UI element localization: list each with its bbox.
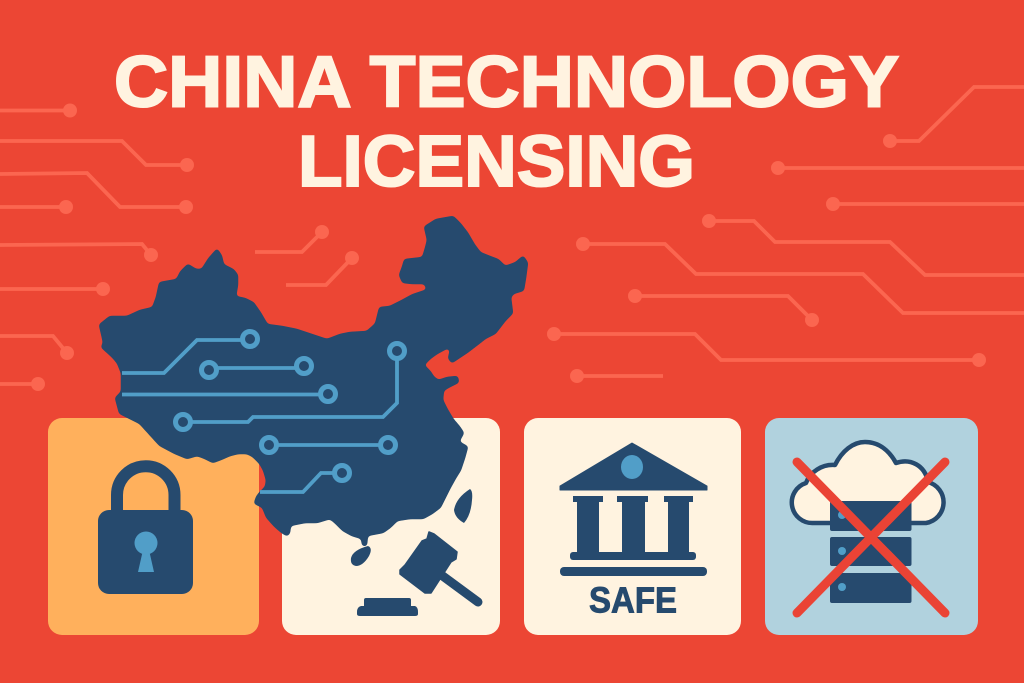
island: Hainan: [351, 546, 371, 566]
title: [114, 42, 899, 202]
icon: red cross: [797, 462, 945, 613]
title: CHINA TECHNOLOGY: [114, 42, 899, 122]
circuit nodes on map: [176, 332, 404, 480]
icon: server stack: [830, 501, 912, 603]
island: Taiwan: [454, 489, 472, 523]
icon: gavel: [357, 532, 478, 616]
map of China: [100, 217, 527, 566]
title: LICENSING: [298, 122, 695, 202]
panel: encryption lock: [48, 418, 259, 635]
panel: legal gavel: [282, 418, 500, 635]
panel: no cloud servers: [765, 418, 978, 635]
background circuit traces: left: [0, 104, 359, 391]
label: SAFE: SAFE: [589, 580, 677, 620]
circuit lines on map: [122, 340, 397, 492]
icon: padlock: [98, 466, 193, 594]
icon: cloud: [792, 442, 944, 523]
panel: SAFE regulator: [524, 418, 741, 635]
icon: bank building: [560, 443, 707, 576]
background circuit traces: right: [547, 87, 1024, 383]
